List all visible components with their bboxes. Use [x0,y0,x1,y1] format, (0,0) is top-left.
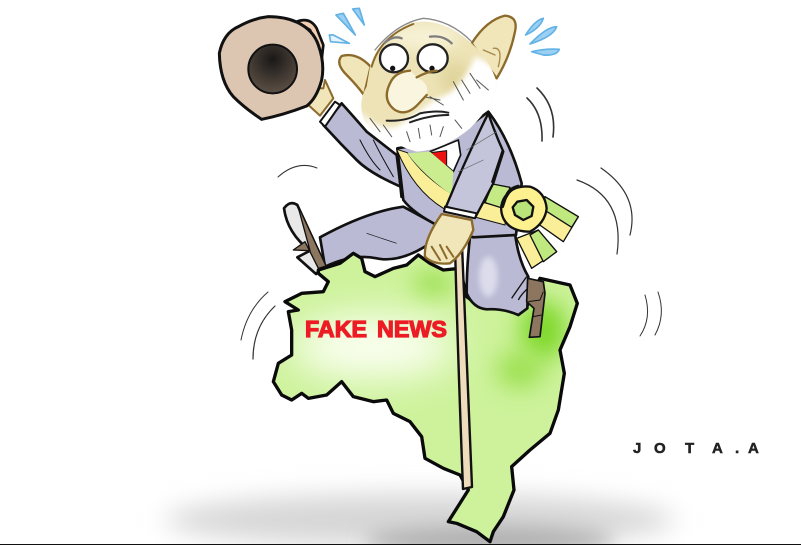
presidential sash [397,149,578,268]
sash tails [538,197,578,242]
label: FAKE NEWS: NEWS [377,316,447,342]
raised hand [306,80,333,116]
signature: JOTA.A [633,440,759,457]
rosette [501,186,547,232]
head and beard [360,18,502,158]
lowered sleeve [446,113,503,216]
bottom border line [0,544,801,545]
label: FAKE NEWS [305,316,447,342]
shirt and red tie [430,140,461,172]
raised arm [320,102,402,197]
map of Brazil [273,253,577,542]
label: FAKE NEWS: FAKE [305,316,367,342]
motion lines [241,88,661,359]
mouth [387,111,448,122]
lower hand on cane [425,214,473,264]
ears [339,16,516,95]
nose [387,71,427,112]
eyes [380,36,452,72]
left leg and shoe [284,203,440,274]
politician upper body [219,8,578,268]
ground shadow [165,494,675,545]
jacket torso [397,112,522,237]
hat [219,17,323,119]
right leg and shoe [467,233,545,337]
sweat drops [329,8,559,55]
walking cane [455,245,472,489]
